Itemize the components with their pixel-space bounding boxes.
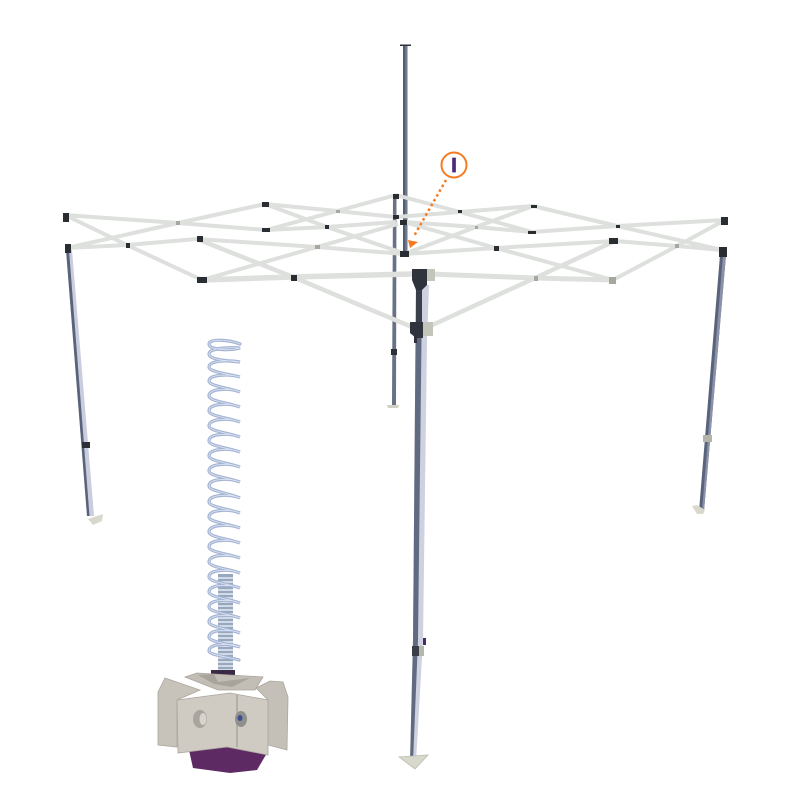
frame brackets [63, 194, 728, 284]
dotted arrow to centre joint [408, 180, 446, 248]
grey connector block [158, 673, 288, 755]
coil spring [209, 340, 240, 660]
callout badge I [442, 152, 466, 178]
centre pole [400, 44, 411, 256]
front foot plate [399, 755, 428, 769]
back leg [387, 195, 399, 408]
spring bolt [211, 574, 235, 677]
front post [410, 269, 435, 762]
right leg [692, 255, 726, 514]
canopy scissor frame [65, 195, 725, 327]
purple knob [189, 745, 267, 773]
left leg [66, 250, 103, 525]
callout badge I: I [451, 155, 457, 177]
